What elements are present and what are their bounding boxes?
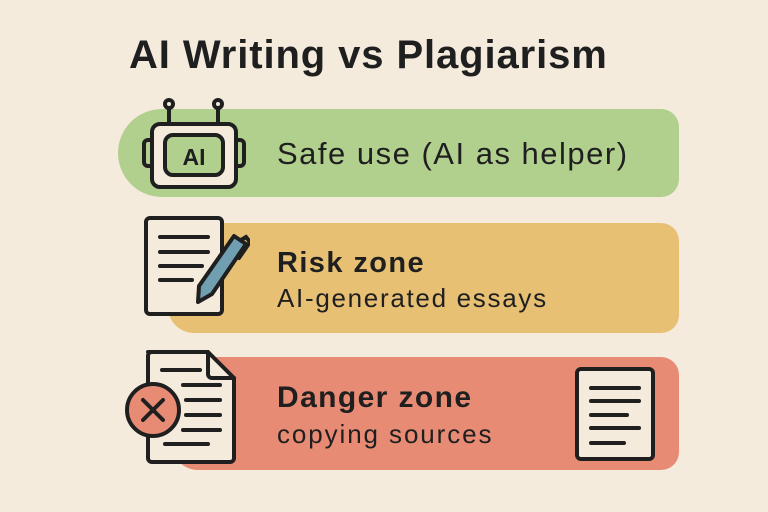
label: danger zone: copying sources — [277, 419, 493, 449]
label: danger zone — [277, 381, 493, 449]
panel: risk zone — [168, 223, 679, 333]
label: danger zone: Danger zone — [277, 381, 472, 414]
label: risk zone: Risk zone — [277, 247, 425, 279]
icon: document right — [575, 367, 655, 461]
panel: danger zone — [172, 357, 679, 470]
icon: robot: AI — [182, 144, 206, 170]
label: risk zone: AI-generated essays — [277, 283, 548, 313]
icon: document with x — [125, 350, 236, 464]
label: risk zone — [277, 247, 548, 313]
icon: robot — [142, 98, 246, 189]
label: safe use: Safe use (AI as helper) — [277, 136, 629, 171]
panel: safe use — [118, 109, 679, 197]
icon: document with pen — [144, 216, 250, 316]
title: AI Writing vs Plagiarism — [129, 33, 608, 77]
